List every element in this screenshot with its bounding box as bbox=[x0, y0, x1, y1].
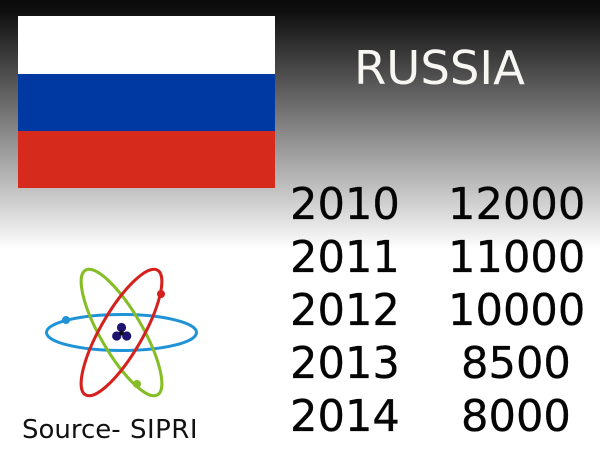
row 2014: 2014 bbox=[290, 392, 400, 442]
row 2013: 2013 bbox=[290, 339, 400, 389]
row 2014 bbox=[290, 392, 571, 442]
row 2011: 11000 bbox=[448, 233, 585, 283]
row 2011 bbox=[290, 233, 585, 283]
electrons bbox=[62, 290, 165, 388]
flag of Russia bbox=[18, 16, 275, 188]
row 2012 bbox=[290, 286, 585, 336]
data table bbox=[290, 180, 585, 442]
row 2012: 2012 bbox=[290, 286, 400, 336]
source note: Source- SIPRI bbox=[22, 414, 198, 444]
row 2014: 8000 bbox=[461, 392, 571, 442]
blue orbit bbox=[46, 314, 196, 350]
row 2012: 10000 bbox=[448, 286, 585, 336]
green orbit bbox=[67, 260, 176, 405]
icon: atom bbox=[45, 268, 198, 398]
red orbit bbox=[67, 260, 176, 405]
row 2010: 2010 bbox=[290, 180, 400, 230]
row 2010 bbox=[290, 180, 585, 230]
row 2011: 2011 bbox=[290, 233, 400, 283]
row 2010: 12000 bbox=[448, 180, 585, 230]
row 2013: 8500 bbox=[461, 339, 571, 389]
nucleus bbox=[112, 323, 131, 341]
title: RUSSIA bbox=[354, 40, 525, 94]
row 2013 bbox=[290, 339, 571, 389]
